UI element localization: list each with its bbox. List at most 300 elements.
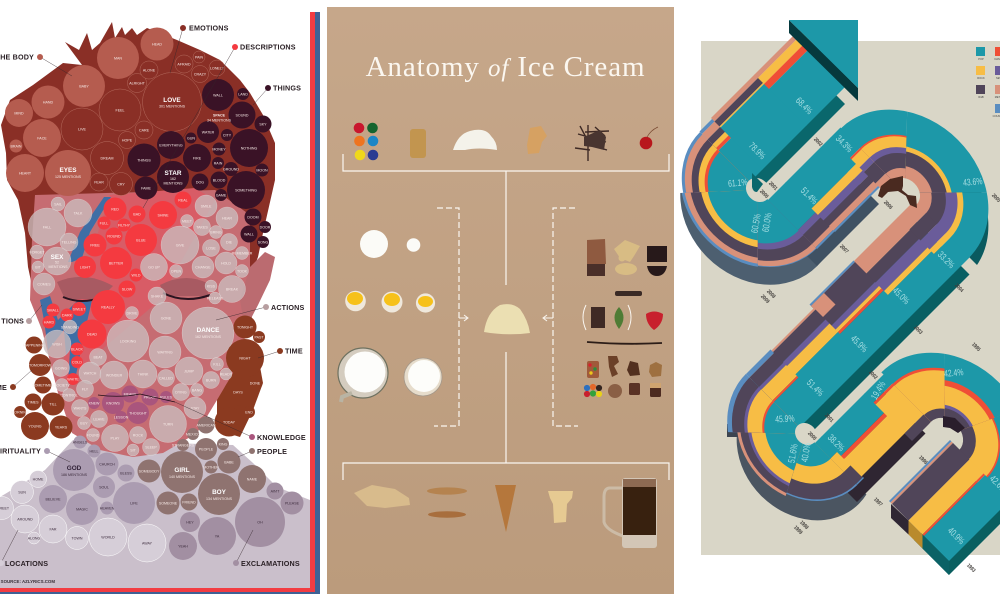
percentage labels: 60.0% xyxy=(760,212,774,233)
action words: SHAKE xyxy=(151,294,164,298)
action words: FORGET xyxy=(30,250,45,254)
category labels: TIME xyxy=(285,346,303,356)
bubbles: things: GUN xyxy=(187,136,195,140)
action words: TURN xyxy=(163,422,173,426)
bubbles: descriptions: BETTER xyxy=(109,262,123,266)
emotion words: AFRAID xyxy=(177,62,191,66)
bubbles: time: NIGHT xyxy=(239,356,251,360)
year labels: 2000 xyxy=(806,430,818,442)
emotion words: LONELY xyxy=(210,66,225,70)
percentage labels: 33.2% xyxy=(936,249,957,271)
year labels: 2000 xyxy=(758,188,770,200)
red forehead tint xyxy=(60,188,215,385)
icon: pie crust xyxy=(354,485,410,508)
bubbles: descriptions: FULL xyxy=(100,222,108,226)
icon: cream jug xyxy=(404,358,442,396)
icon: sprinkles colour dots xyxy=(354,123,378,160)
action words: TAKES xyxy=(196,226,208,230)
bubbles: time xyxy=(11,316,265,440)
bubbles: the body: EYES xyxy=(59,167,77,174)
action words: TOOK xyxy=(237,270,248,274)
bubbles: people: FRIEND xyxy=(182,500,196,504)
bubbles: knowledge: KNOWS xyxy=(106,402,120,406)
icon: cake cone xyxy=(548,491,573,523)
leader lines xyxy=(1,28,280,563)
bubbles: the body xyxy=(5,28,174,196)
bubbles: spirituality: ANGELS xyxy=(73,440,88,444)
icon: strawberry xyxy=(646,312,663,330)
action words: GIVE xyxy=(176,244,185,248)
bubbles: people: PEOPLE xyxy=(199,448,214,452)
bubbles: things: MONEY xyxy=(212,148,226,152)
bubbles: spirituality: GOD xyxy=(67,465,82,472)
title: Anatomy of Ice Cream xyxy=(366,51,645,83)
location words: WORLD xyxy=(101,536,115,540)
bubbles: the body: BABY xyxy=(79,84,89,88)
icon: cocoa and chocolate xyxy=(587,239,606,276)
action words: FOUND xyxy=(87,434,100,438)
bubbles: things: RAIN xyxy=(214,162,223,166)
bubbles: knowledge: KNEW xyxy=(89,402,100,406)
bubbles: things: EVERYTHING xyxy=(159,144,183,148)
action words: CONTROL xyxy=(60,394,78,398)
percentage labels: 51.4% xyxy=(799,185,820,207)
action words: SAIL xyxy=(54,202,62,206)
bubbles: things: FAME xyxy=(141,186,151,190)
action words: WISH xyxy=(52,342,62,346)
bubbles: descriptions: SWEET xyxy=(73,308,86,312)
bubbles: descriptions: WHITE xyxy=(67,378,79,382)
year labels: 2001 xyxy=(823,412,835,424)
icon: caramel xyxy=(527,126,547,154)
action words: ROCK xyxy=(133,434,144,438)
bubbles: the body: HEAD xyxy=(152,42,162,46)
emotion words: CRAZY xyxy=(194,72,207,76)
bubbles: spirituality: BELIEVE xyxy=(46,498,61,502)
emotion words: FEEL xyxy=(116,108,124,112)
action words: BURN xyxy=(206,378,216,382)
year labels: 1997 xyxy=(872,496,884,508)
category labels xyxy=(0,24,306,584)
ribbon side walls xyxy=(680,96,1000,575)
ribbon turn 2: 2004-2006 xyxy=(841,110,988,257)
action words: WAITING xyxy=(157,350,173,354)
bubbles: spirituality: HELL xyxy=(90,450,98,454)
action words: GOING xyxy=(55,366,67,370)
bubbles: people: STRANGERS xyxy=(172,444,195,448)
bubbles: time: TODAY xyxy=(223,420,236,424)
action words: BEAT xyxy=(93,356,103,360)
ribbon section 1: 2001-2002 xyxy=(698,30,851,182)
percentage labels: 45.0% xyxy=(891,285,912,307)
bubbles: descriptions xyxy=(42,192,192,385)
bubbles: actions xyxy=(28,195,248,456)
bubbles: descriptions: SMALL xyxy=(47,308,59,312)
bubbles: exclamations: HEY xyxy=(186,520,194,524)
action words: WONDER xyxy=(106,374,123,378)
category labels: ACTIONS xyxy=(271,303,304,312)
location words: SUN xyxy=(18,490,26,494)
year labels: 2002 xyxy=(867,369,879,381)
action words: HEAR xyxy=(222,216,232,220)
emotion words: LOVE xyxy=(163,97,181,104)
action words: SEX xyxy=(51,254,64,261)
ribbon section 5: 1993 xyxy=(889,440,1000,575)
bubbles: knowledge: MEANS xyxy=(124,392,137,396)
action words: SIT xyxy=(130,448,137,452)
action words: GO UP xyxy=(148,266,160,270)
icon: sugar cone xyxy=(495,485,516,532)
icon: root beer float mug xyxy=(604,478,657,548)
emotion words: HOPE xyxy=(122,138,133,142)
bubbles: things: WALL xyxy=(213,94,223,98)
action words xyxy=(30,202,253,452)
bubbles: descriptions: BLUE xyxy=(136,238,146,242)
bubbles: things: SOUND xyxy=(236,114,249,118)
action words: SOCIETY xyxy=(54,384,70,388)
action words: KILL xyxy=(213,362,221,366)
bubbles: time: TIMES xyxy=(28,400,39,404)
category labels: LOCATIONS xyxy=(5,559,48,568)
bubbles: time: MORNING xyxy=(11,410,29,414)
bubbles: descriptions: REAL xyxy=(178,198,188,202)
ribbon turn 3: 1997-2000 xyxy=(727,374,857,501)
ribbon section 4: 1995-1997 xyxy=(815,374,932,490)
hole shading turn 4 xyxy=(943,416,965,433)
emotion words: LIVE xyxy=(78,128,86,132)
year labels: 1996 xyxy=(917,454,929,466)
action words: RELEASE xyxy=(207,296,224,300)
lips line xyxy=(98,394,175,402)
location words: TOWN xyxy=(72,536,83,540)
bubbles: exclamations: YA xyxy=(215,534,220,538)
legend: ROCK xyxy=(977,76,985,80)
chart background xyxy=(701,41,1000,555)
bubbles: the body: 125 MENTIONS xyxy=(55,175,82,179)
year labels xyxy=(758,136,1000,574)
bubbles: people: BABE xyxy=(224,460,234,464)
year labels: 2001 xyxy=(767,180,779,192)
category labels: THINGS xyxy=(273,84,301,92)
action words: MEET xyxy=(182,220,193,224)
icon: mint chip in parentheses xyxy=(583,305,631,330)
bubbles: spirituality: 186 MENTIONS xyxy=(61,473,88,477)
percentage labels: 38.2% xyxy=(826,432,847,454)
year labels: 2004 xyxy=(953,282,965,294)
emotion words: FEAR xyxy=(94,180,104,184)
percentage labels: 42.4% xyxy=(944,367,964,379)
action words: BANG xyxy=(192,388,202,392)
bubbles: exclamations xyxy=(169,482,304,560)
emotion words: ALRIGHT xyxy=(129,82,146,86)
bubbles: things: GROUND xyxy=(223,168,239,172)
action words: BREAK xyxy=(226,288,239,292)
icon: ice cream scoop xyxy=(484,304,530,334)
category labels: PEOPLE xyxy=(257,447,287,456)
emotion words xyxy=(78,56,225,186)
percentage labels: 45.9% xyxy=(849,333,870,355)
action words: HOLD xyxy=(221,262,231,266)
bubbles: descriptions: LIGHT xyxy=(80,266,91,270)
year labels: 2008 xyxy=(765,288,777,300)
ribbon section 2: 2003-2007 xyxy=(768,128,892,252)
action words: WATCH xyxy=(84,372,97,376)
action words: STAY xyxy=(191,406,200,410)
ribbon turn 1: 1998-2001 xyxy=(682,132,816,267)
action words: KISS xyxy=(207,284,216,288)
bubbles: things: CITY xyxy=(223,134,232,138)
percentage labels: 40.0% xyxy=(799,442,813,463)
action words: LOSE xyxy=(206,246,216,250)
year labels: 1995 xyxy=(970,341,982,353)
hole shading turn 1 xyxy=(752,173,763,192)
bubbles: the body: MAN xyxy=(114,56,122,60)
action words: CALLED xyxy=(159,376,173,380)
bubbles: spirituality xyxy=(39,436,155,525)
year labels: 2007 xyxy=(838,243,850,255)
hair xyxy=(1,22,275,281)
bubbles: knowledge: LESSON xyxy=(114,416,129,420)
bubbles: descriptions: BAD xyxy=(133,212,141,216)
action words: OPEN xyxy=(171,270,181,274)
bubbles: people: BOY xyxy=(212,489,227,496)
bubbles: things: SOMETHING xyxy=(235,188,257,192)
ear xyxy=(240,252,275,317)
category labels: DESCRIPTIONS xyxy=(240,42,296,52)
legend xyxy=(976,47,1000,118)
year labels: 1993 xyxy=(965,562,977,574)
icon: cookies and cream xyxy=(647,246,667,276)
bubbles: people: KING xyxy=(219,442,228,446)
icon: cherry xyxy=(640,127,658,149)
face xyxy=(30,190,252,457)
icon: cream drops xyxy=(360,230,420,258)
action words: GONE xyxy=(161,316,172,320)
bubbles: descriptions: WILD xyxy=(132,274,141,278)
icon: vanilla bean xyxy=(587,342,662,344)
bubbles: the body: HEART xyxy=(19,172,32,176)
action words: PLAY xyxy=(111,436,120,440)
right eyelid xyxy=(160,278,208,296)
bubbles: people: 134 MENTIONS xyxy=(206,497,233,501)
bubbles: people: NAME xyxy=(247,478,258,482)
year labels: 1999 xyxy=(792,524,804,536)
category labels: KNOWLEDGE xyxy=(257,433,306,442)
bubbles: things xyxy=(128,79,272,248)
bubbles: time: YOUNG xyxy=(28,424,42,428)
bubbles: people: SOMEBODY xyxy=(139,470,160,474)
action words: TELLING xyxy=(62,240,77,244)
left eyelid xyxy=(57,277,113,299)
bubbles: time: END xyxy=(245,410,253,414)
bubbles: things: THINGS xyxy=(137,158,151,162)
percentage labels: 40.9% xyxy=(946,525,967,547)
action words: WANTS xyxy=(74,406,87,410)
bubbles: people: GIRL xyxy=(174,467,190,474)
category labels: TIONS xyxy=(1,316,24,326)
location words: ALONG xyxy=(28,536,40,540)
ribbon turn 4: 1993-1995 xyxy=(828,319,1000,553)
bubbles: things: NOTHING xyxy=(241,146,257,150)
icon: chocolate drizzle xyxy=(575,125,609,161)
bubbles: things: DOG xyxy=(196,180,204,184)
action words: LEAVE xyxy=(93,418,105,422)
bubbles: things: WALL xyxy=(244,232,254,236)
percentage labels: 45.9% xyxy=(775,413,795,425)
bubbles: spirituality: SOUL xyxy=(99,486,109,490)
year labels: 1998 xyxy=(798,519,810,531)
icon: chocolate chain xyxy=(615,291,642,296)
arrow: into ice cream from right xyxy=(543,315,553,321)
action words: DYING xyxy=(175,390,187,394)
shoulders and neck xyxy=(0,440,310,588)
bubbles: emotions xyxy=(61,51,225,196)
bubbles: spirituality: MAGIC xyxy=(76,508,88,512)
bubbles: spirituality: BLESS xyxy=(120,472,132,476)
action words: FLY xyxy=(82,388,89,392)
bubbles: spirituality: LIFE xyxy=(130,502,138,506)
icon: candy mix xyxy=(587,356,662,378)
emotion words: DREAM xyxy=(101,156,113,160)
bubbles: things: 34 MENTIONS xyxy=(207,118,232,122)
bubbles: things: MOON xyxy=(256,168,268,172)
bubbles: people: 140 MENTIONS xyxy=(169,475,196,479)
icon: cookie dough xyxy=(614,240,640,275)
bubbles: things: LAND xyxy=(238,92,248,96)
action words: 162 MENTIONS xyxy=(195,335,222,339)
diagram lines xyxy=(343,154,669,480)
location words: AROUND xyxy=(17,518,33,522)
bubbles: things: WATER xyxy=(202,130,215,134)
icon: arrowhead xyxy=(789,20,858,101)
bubbles: things: DOOR xyxy=(260,226,271,230)
lightning bolt xyxy=(68,197,111,262)
emotion words: ALONE xyxy=(143,68,156,72)
eyelashes xyxy=(63,293,210,301)
percentage labels: 43.6% xyxy=(963,176,983,188)
poster border xyxy=(0,12,320,594)
icon: egg yolks xyxy=(345,291,435,313)
percentage labels: 51.4% xyxy=(805,377,826,399)
percentage labels: 34.3% xyxy=(834,133,855,155)
bubbles: time: TONIGHT xyxy=(237,326,254,330)
bubbles: the body: HAND xyxy=(43,100,53,104)
bubbles: time: YEARS xyxy=(55,426,68,430)
action words: SMILE xyxy=(201,204,212,208)
action words: STANDING xyxy=(61,326,79,330)
bubbles: things: DOOM xyxy=(247,216,259,220)
action words: CHANGE xyxy=(195,266,211,270)
bubbles: things: SKY xyxy=(259,122,267,126)
bubbles: things: BLOOD xyxy=(213,178,226,182)
percentage labels: 19.4% xyxy=(869,379,888,402)
year labels: 2006 xyxy=(882,199,894,211)
bubbles: descriptions: SLOW xyxy=(122,288,133,292)
bubbles: time: SOMETIMES xyxy=(32,384,54,388)
percentage labels: 60.5% xyxy=(749,213,763,234)
bubbles: people: SOMEONE xyxy=(159,502,178,506)
bubbles: time: DONE xyxy=(250,382,261,386)
action words: SLEEP xyxy=(145,446,157,450)
category labels: EXCLAMATIONS xyxy=(241,559,300,568)
bubbles: knowledge: RULES xyxy=(160,396,173,400)
bubbles: spirituality: HEAVEN xyxy=(100,506,115,510)
percentage labels: 51.6% xyxy=(786,443,800,464)
bubbles: things: MENTIONS xyxy=(164,182,183,186)
action words: THINK xyxy=(138,372,149,376)
bubbles: exclamations: YEAH xyxy=(178,544,188,548)
action words: BRING xyxy=(210,230,222,234)
bubbles: time: PAST xyxy=(254,336,264,340)
action words: 52 xyxy=(55,260,59,264)
action words: REMEMBER xyxy=(232,252,253,256)
lower lightning bolt xyxy=(40,296,92,384)
percentage labels: 61.1% xyxy=(728,177,748,189)
bubbles: things: 162 xyxy=(170,177,176,181)
bubbles: descriptions: DEAD xyxy=(87,332,97,336)
year labels: 2009 xyxy=(759,293,771,305)
emotion words: 301 MENTIONS xyxy=(159,104,186,108)
location words: HOME xyxy=(33,478,44,482)
bubbles: people: MOTHER xyxy=(203,466,219,470)
bubbles: descriptions: FILTHY xyxy=(118,224,131,228)
year labels: 2003 xyxy=(912,324,924,336)
percentage labels xyxy=(728,95,1000,547)
bubbles: the body: FACE xyxy=(37,136,47,140)
lower hair on right xyxy=(217,369,263,437)
action words: FALL xyxy=(43,226,51,230)
hole shading turn 2 xyxy=(878,176,917,208)
percentage labels: 68.4% xyxy=(794,95,815,117)
ribbon section 3: 2000-2004 xyxy=(743,200,970,428)
bubbles: descriptions: COLD xyxy=(72,360,82,364)
percentage labels: 78.9% xyxy=(747,140,768,162)
action words: DANCE xyxy=(197,327,220,334)
location words: FAR xyxy=(50,528,57,532)
action words: COMES xyxy=(37,282,51,286)
bubbles: exclamations: AIN'T xyxy=(271,490,280,494)
bubbles: time: TOMORROW xyxy=(29,364,52,368)
bubbles: locations xyxy=(0,470,166,562)
bubbles: the body: BRAIN xyxy=(11,144,22,148)
icon: whipped topping xyxy=(453,130,497,150)
bubbles: descriptions: BLACK xyxy=(71,348,83,352)
bubbles: time: HAPPENING xyxy=(23,344,45,348)
legend: POP xyxy=(978,57,984,61)
emotion words: CRY xyxy=(117,182,125,186)
action words: BUY xyxy=(80,422,88,426)
bubbles: the body: MIND xyxy=(14,112,24,116)
bubbles: time: TILL xyxy=(49,402,57,406)
action words: TALK xyxy=(74,212,83,216)
bubbles: knowledge: PROOF xyxy=(144,396,157,400)
bubbles: time: DAYS xyxy=(233,390,243,394)
bubbles: descriptions: ROUND xyxy=(107,234,121,238)
location words xyxy=(0,478,153,546)
bubbles: descriptions: HARD xyxy=(44,320,54,324)
arrow: into ice cream from left xyxy=(459,315,468,321)
year labels: 2002 xyxy=(812,136,824,148)
legend: R&B xyxy=(978,95,984,99)
action words: BIT xyxy=(35,266,42,270)
action words: MENTIONS xyxy=(49,265,68,269)
bubbles: people: MEXICO xyxy=(186,432,200,436)
emotion words: PAIN xyxy=(195,56,203,60)
bubbles: knowledge xyxy=(88,386,173,424)
panel: lyric bubble portrait xyxy=(0,12,320,594)
bubbles: things: GAME xyxy=(216,194,227,198)
category labels: SOURCE: AZLYRICS.COM xyxy=(1,579,55,584)
